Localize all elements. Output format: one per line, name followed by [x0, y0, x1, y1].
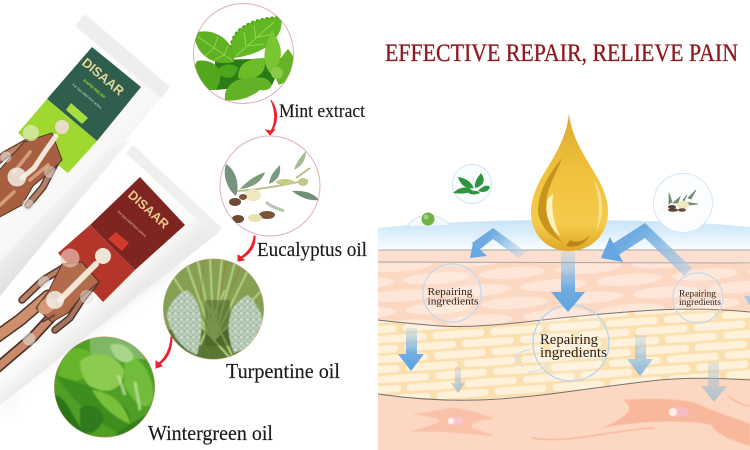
arrow: edge down — [744, 296, 750, 306]
tube: red DISAAR — [0, 145, 222, 417]
weight tag: red tube — [108, 232, 129, 251]
label: lime band — [18, 99, 97, 173]
tube: green DISAAR — [0, 14, 170, 296]
label: turpentine oil: Turpentine oil — [226, 359, 340, 383]
arrow: mint to eucalyptus — [266, 100, 277, 135]
fibroblast left — [410, 408, 494, 436]
bubble: repairing ingredients left: Repairing — [428, 287, 473, 298]
bubble: repairing ingredients center — [516, 305, 609, 381]
fibroblast right — [532, 396, 750, 446]
bubble: eucalyptus — [654, 174, 712, 232]
label: eucalyptus oil: Eucalyptus oil — [257, 239, 367, 261]
bubble: repairing ingredients center: ingredients — [540, 345, 607, 361]
layer: blue surface — [378, 220, 750, 250]
ingredient: wintergreen photo — [54, 337, 156, 437]
arrow: lower left down — [398, 328, 424, 371]
layer: stratum corneum — [378, 250, 750, 263]
brand: DISAAR green: DISAAR — [79, 55, 127, 99]
bubble: mint — [452, 164, 492, 204]
skin boundary lines — [378, 250, 750, 400]
arrow: middle right down — [627, 335, 653, 376]
layer: fat cells — [378, 309, 750, 400]
subtitle: rapid relief: RAPID RELIEF — [82, 78, 107, 100]
ingredient: eucalyptus photo — [220, 136, 320, 236]
arrow: small faded down — [451, 367, 465, 393]
bubble: repairing ingredients right: ingredients — [679, 297, 722, 307]
bubble: repairing ingredients center: Repairing — [540, 332, 598, 348]
bubble: repairing ingredients left: ingredients — [428, 296, 478, 308]
figure: muscle body on green tube — [0, 120, 69, 218]
ingredient: mint photo — [194, 4, 295, 104]
arrow: far right down — [701, 362, 727, 402]
description: green tube: For fast relief from aches — [71, 83, 103, 110]
bubble: half bubble with green ball — [408, 212, 449, 226]
layer: deep dermis — [378, 378, 750, 450]
bubble: repairing ingredients right: Repairing — [679, 288, 717, 298]
ingredient: turpentine photo — [163, 258, 265, 360]
weight tag: green tube — [66, 103, 88, 124]
label: dark red band — [90, 177, 185, 270]
label: dark green band — [47, 47, 141, 141]
panel: product tubes — [0, 14, 222, 417]
description: red tube: For fast relief from aches — [116, 210, 147, 238]
oil drop — [531, 113, 608, 251]
arrow: center down — [551, 251, 585, 312]
layer: peach epidermis cells — [378, 262, 750, 327]
arrow: left bent arrow — [470, 228, 526, 258]
arrow: eucalyptus to turpentine — [238, 236, 255, 261]
label: mint extract: Mint extract — [279, 101, 366, 122]
label: bright red band — [58, 225, 135, 302]
arrow: turpentine to wintergreen — [156, 337, 172, 368]
panel: skin diagram — [378, 113, 750, 450]
arrow: right bent arrow — [601, 223, 692, 276]
bubble: repairing ingredients left — [423, 264, 481, 322]
figure: muscle body on red tube — [0, 248, 111, 368]
label: wintergreen oil: Wintergreen oil — [148, 421, 273, 445]
bubble: repairing ingredients right — [673, 273, 723, 323]
brand: DISAAR red: DISAAR — [125, 187, 173, 232]
